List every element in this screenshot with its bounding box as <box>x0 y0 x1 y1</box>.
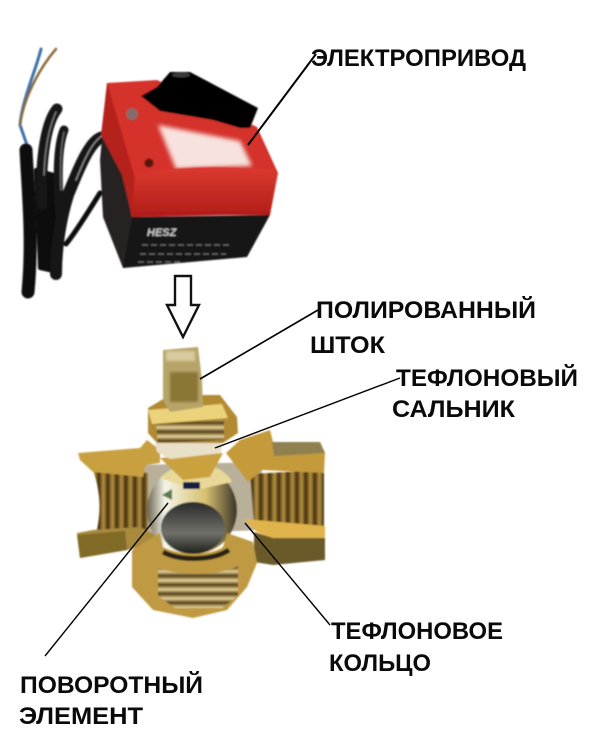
handle <box>141 72 258 128</box>
actuator lid top <box>107 80 278 190</box>
label: PTFE gland <box>392 364 578 423</box>
actuator black base with label: HESZ <box>147 227 178 239</box>
label: PTFE ring <box>329 618 503 677</box>
brass valve photo <box>77 347 325 618</box>
label: polished stem <box>310 296 536 359</box>
stem neck <box>160 453 223 480</box>
polished stem <box>163 347 203 412</box>
leader: PTFE gland <box>215 378 400 448</box>
bottom port <box>132 533 257 618</box>
label: rotating element: ПОВОРОТНЫЙ <box>20 671 203 699</box>
right port top wall <box>226 430 325 482</box>
inner cavity backing <box>140 462 262 535</box>
label: PTFE gland: ТЕФЛОНОВЫЙ <box>396 364 578 392</box>
wires <box>20 49 105 292</box>
leader: PTFE ring <box>245 523 330 625</box>
label: polished stem: ШТОК <box>310 332 385 359</box>
highlight on lid <box>158 125 252 169</box>
label: PTFE gland: САЛЬНИК <box>392 396 515 423</box>
label: rotating element: ЭЛЕМЕНТ <box>19 703 143 730</box>
actuator lid front <box>132 167 278 217</box>
ball opening <box>161 502 225 554</box>
label: rotating element <box>19 671 203 730</box>
left port bottom wall <box>77 527 160 558</box>
label: PTFE ring: КОЛЬЦО <box>329 650 431 677</box>
label: polished stem: ПОЛИРОВАННЫЙ <box>316 296 536 324</box>
leader lines <box>45 54 400 656</box>
arrow: actuator connects to valve <box>167 276 199 337</box>
screws <box>126 108 138 120</box>
leader: rotating element <box>45 503 168 656</box>
label: actuator: ЭЛЕКТРОПРИВОД <box>311 45 526 72</box>
actuator black base with label <box>123 215 270 268</box>
leader: actuator <box>248 54 316 145</box>
leader: polished stem <box>200 310 318 379</box>
actuator left side <box>100 83 136 268</box>
left port top wall <box>78 440 160 477</box>
electric actuator photo <box>20 49 278 292</box>
ball <box>147 465 237 555</box>
right port bottom wall <box>244 519 325 539</box>
PTFE gland <box>155 436 223 459</box>
left port thread <box>92 468 148 534</box>
right port thread <box>250 470 324 526</box>
threaded gland nut <box>148 395 238 443</box>
label: PTFE ring: ТЕФЛОНОВОЕ <box>331 618 503 645</box>
